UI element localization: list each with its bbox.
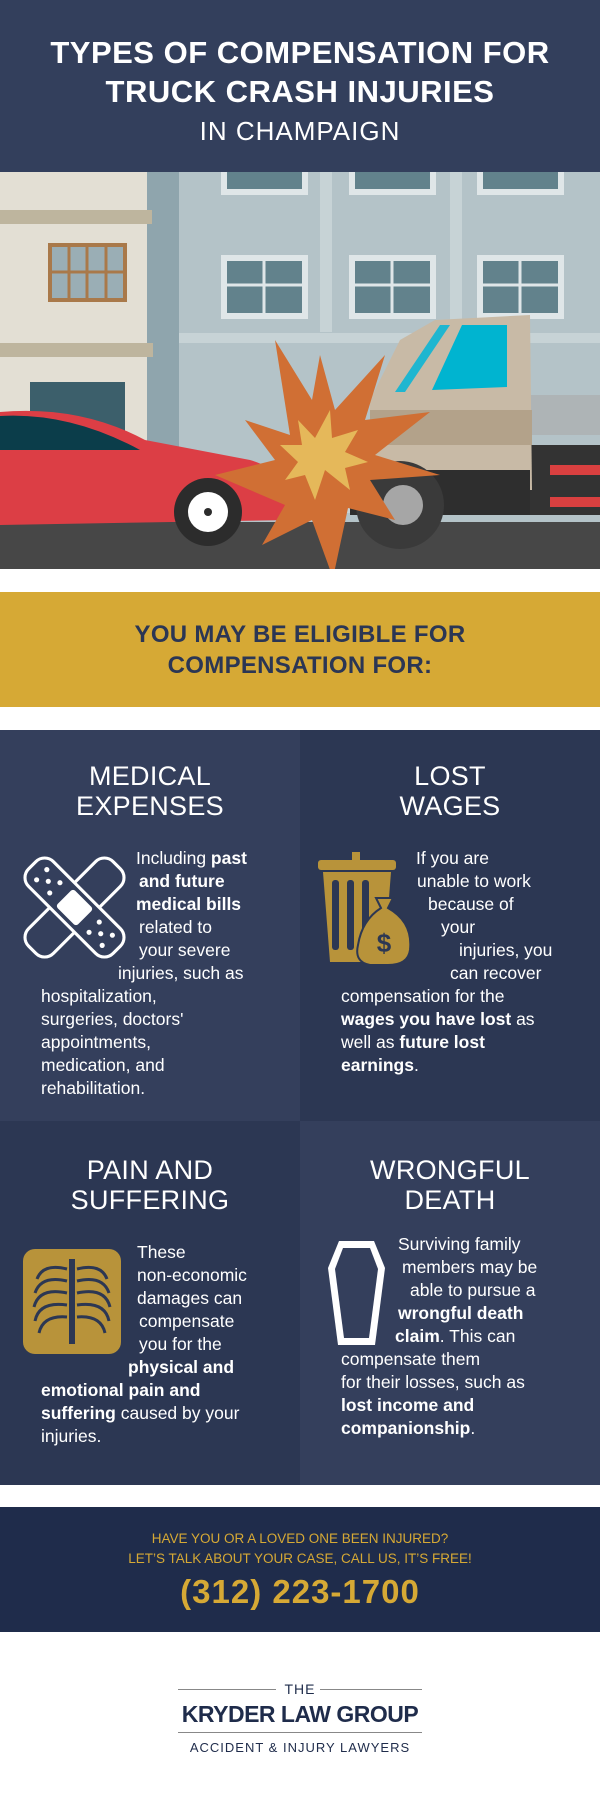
panel: wrongful death — [300, 1121, 600, 1485]
heading: medical expenses: MEDICAL — [89, 761, 211, 791]
gold banner — [0, 592, 600, 707]
panel: pain and suffering — [0, 1121, 300, 1485]
phone number: (312) 223-1700 — [180, 1573, 420, 1610]
text: lost wages: can recover — [450, 963, 541, 983]
text: wrongful death: Surviving family — [398, 1234, 521, 1254]
text: lost wages: injuries, you — [459, 940, 552, 960]
text: medical expenses: Including past — [136, 848, 247, 868]
heading: pain and suffering: SUFFERING — [71, 1185, 229, 1215]
text: wrongful death: able to pursue a — [410, 1280, 536, 1300]
text: medical expenses: your severe — [139, 940, 230, 960]
text: lost wages: unable to work — [417, 871, 531, 891]
text: medical expenses: and future — [139, 871, 225, 891]
text: wrongful death: lost income and — [341, 1395, 474, 1415]
text: wrongful death: companionship. — [341, 1418, 475, 1438]
text: wrongful death: compensate them — [341, 1349, 480, 1369]
title — [50, 35, 550, 109]
cta text: LET’S TALK ABOUT YOUR CASE, CALL US, IT’S FREE! — [128, 1551, 472, 1566]
heading: medical expenses — [76, 761, 224, 821]
text: lost wages: your — [441, 917, 475, 937]
logo: ACCIDENT & INJURY LAWYERS — [190, 1740, 410, 1755]
text: medical expenses: hospitalization, — [41, 986, 157, 1006]
call to action band — [0, 1507, 600, 1632]
heading: lost wages: LOST — [414, 761, 486, 791]
text: pain and suffering: physical and — [128, 1357, 234, 1377]
truck — [530, 395, 600, 435]
text: lost wages: compensation for the — [341, 986, 504, 1006]
text: pain and suffering: emotional pain and — [41, 1380, 200, 1400]
text: pain and suffering: suffering caused by your — [41, 1403, 239, 1423]
text: medical expenses: appointments, — [41, 1032, 151, 1052]
text: lost wages: wages you have lost as — [341, 1009, 535, 1029]
heading: wrongful death — [370, 1155, 530, 1215]
text: medical expenses: medication, and — [41, 1055, 165, 1075]
illustration: truck crash — [0, 172, 600, 569]
heading: lost wages — [399, 761, 500, 821]
icon: ribcage — [23, 1249, 121, 1354]
gold banner: COMPENSATION FOR: — [168, 652, 432, 679]
icon: bandages — [23, 856, 126, 958]
text: wrongful death: wrongful death — [398, 1303, 523, 1323]
text: pain and suffering: you for the — [139, 1334, 222, 1354]
text: wrongful death: claim. This can — [395, 1326, 515, 1346]
title: TRUCK CRASH INJURIES — [106, 74, 494, 109]
text: pain and suffering: These — [137, 1242, 186, 1262]
cta text: HAVE YOU OR A LOVED ONE BEEN INJURED? — [152, 1531, 448, 1546]
text: wrongful death: members may be — [402, 1257, 537, 1277]
icon: coffin — [328, 1241, 385, 1345]
header — [0, 0, 600, 172]
icon: trash can and money bag: $ — [377, 928, 392, 958]
text: medical expenses: injuries, such as — [118, 963, 243, 983]
heading: wrongful death: DEATH — [404, 1185, 496, 1215]
gold banner: YOU MAY BE ELIGIBLE FOR — [135, 621, 465, 648]
text: wrongful death — [341, 1234, 537, 1438]
subtitle: IN CHAMPAIGN — [200, 116, 400, 146]
heading: medical expenses: EXPENSES — [76, 791, 224, 821]
title: TYPES OF COMPENSATION FOR — [50, 35, 550, 70]
panel: lost wages — [300, 730, 600, 1121]
text: lost wages: If you are — [416, 848, 489, 868]
logo: THE — [284, 1681, 316, 1697]
heading: pain and suffering: PAIN AND — [87, 1155, 213, 1185]
heading: wrongful death: WRONGFUL — [370, 1155, 530, 1185]
explosion — [215, 340, 440, 578]
logo: KRYDER LAW GROUP — [182, 1701, 418, 1727]
text: medical expenses: related to — [139, 917, 212, 937]
panel: medical expenses — [0, 730, 300, 1121]
cta text — [128, 1531, 472, 1566]
text: pain and suffering: damages can — [137, 1288, 242, 1308]
text: medical expenses: surgeries, doctors' — [41, 1009, 183, 1029]
text: lost wages — [341, 848, 552, 1075]
text: pain and suffering: non-economic — [137, 1265, 247, 1285]
text: medical expenses: rehabilitation. — [41, 1078, 145, 1098]
icon: trash can and money bag — [318, 852, 410, 964]
car — [0, 411, 290, 525]
heading: lost wages: WAGES — [399, 791, 500, 821]
text: medical expenses — [41, 848, 247, 1098]
text: pain and suffering: injuries. — [41, 1426, 101, 1446]
logo — [178, 1681, 422, 1755]
heading: pain and suffering — [71, 1155, 229, 1215]
text: wrongful death: for their losses, such as — [341, 1372, 525, 1392]
text: lost wages: earnings. — [341, 1055, 419, 1075]
text: pain and suffering — [41, 1242, 247, 1446]
text: pain and suffering: compensate — [139, 1311, 234, 1331]
text: medical expenses: medical bills — [136, 894, 241, 914]
text: lost wages: because of — [428, 894, 514, 914]
text: lost wages: well as future lost — [341, 1032, 485, 1052]
